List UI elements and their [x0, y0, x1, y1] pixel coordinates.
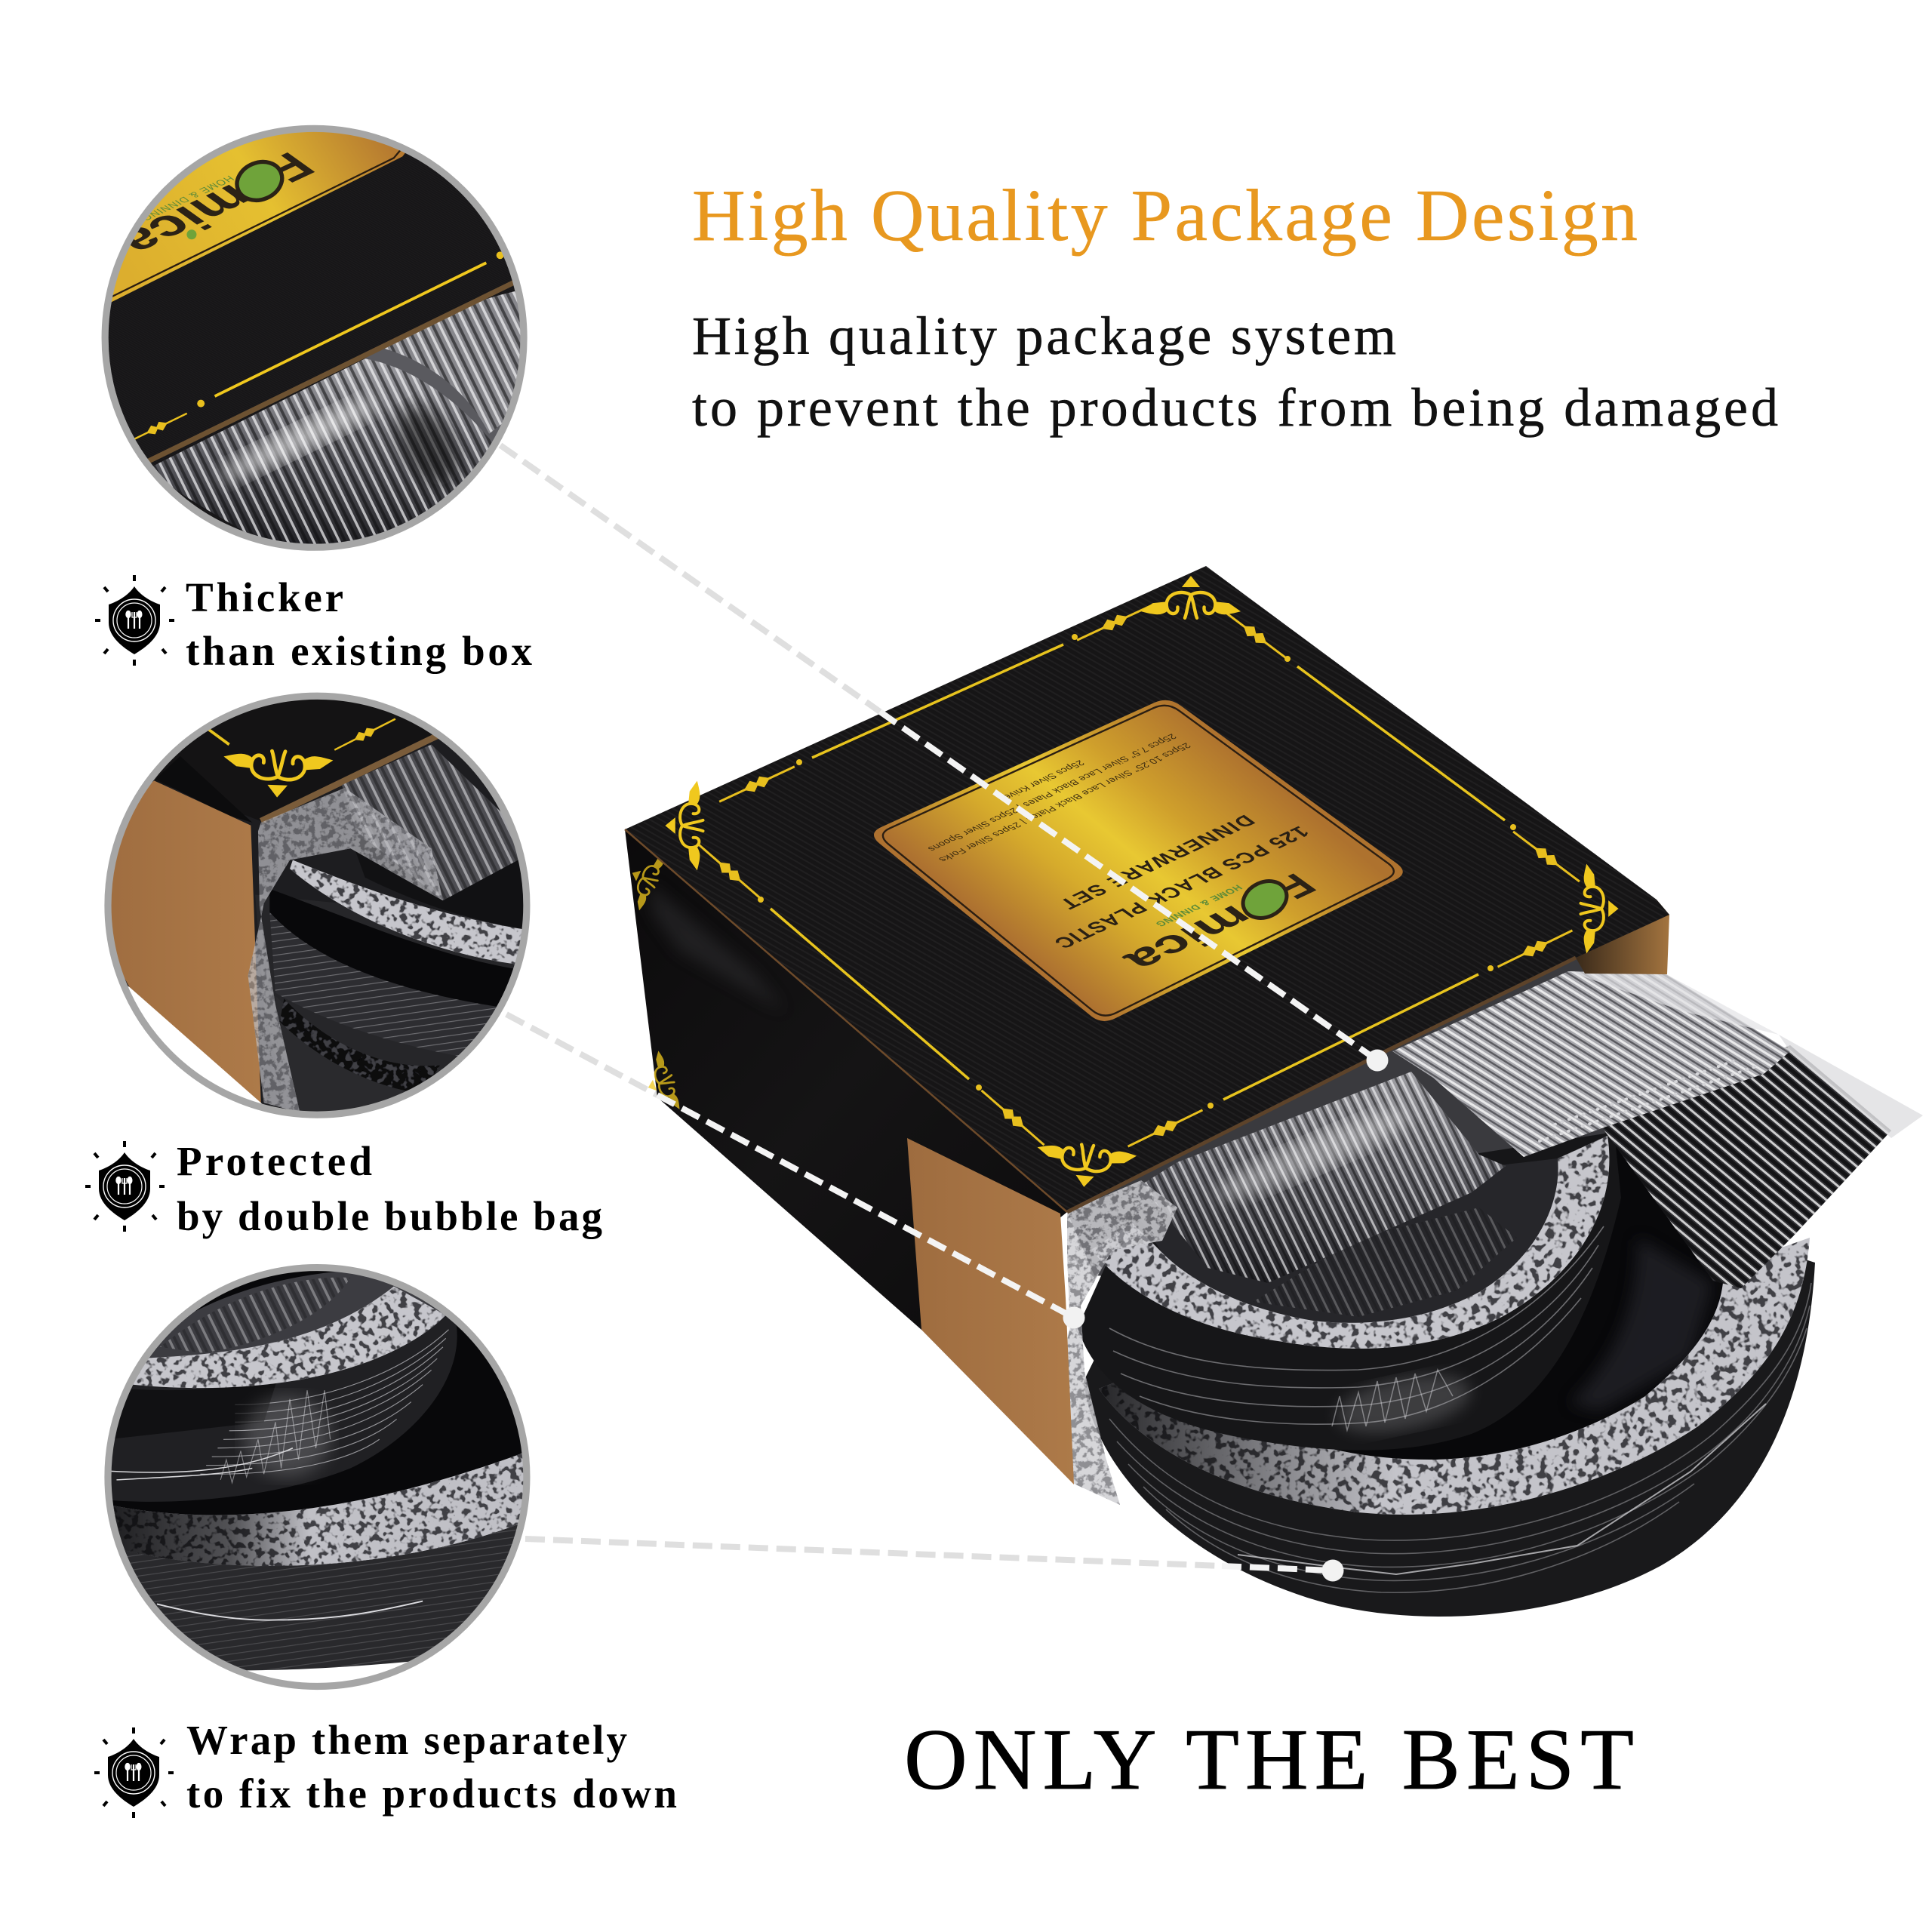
bag: forks — [1600, 1035, 1923, 1288]
label logo: HOME & DINNING — [1153, 883, 1245, 928]
subtitle — [692, 306, 1778, 438]
wrap scratches — [244, 1396, 331, 1477]
label: thicker than existing box: than existing box — [186, 628, 533, 674]
callout dot: bubble bag — [1063, 1307, 1085, 1328]
label: protected by double bubble bag: Protected — [177, 1138, 372, 1184]
wrap scratches — [1332, 1364, 1475, 1443]
small plate stack — [1078, 1132, 1621, 1451]
bag backing — [1067, 958, 1666, 1283]
side gloss — [649, 883, 785, 1011]
box side face — [625, 829, 1067, 1330]
gold corner ornaments — [666, 577, 1617, 1190]
detail circle: bubble bag — [104, 693, 530, 1118]
gold frame lines — [758, 634, 1516, 1109]
icon: shield 3 — [94, 1727, 174, 1818]
box top face — [625, 566, 1669, 1212]
callout line: bubble bag (white part) — [657, 1095, 1074, 1318]
callout line: bubble bag (grey part) — [506, 1014, 657, 1095]
label: thicker than existing box — [186, 574, 533, 674]
detail circle: thicker box: mica — [106, 177, 269, 264]
label: wrap them separately: Wrap them separately — [186, 1717, 627, 1763]
label logo: F — [1266, 867, 1327, 905]
large plate stack — [1084, 1132, 1815, 1617]
detail circle: thicker box — [101, 125, 528, 551]
slogan: ONLY THE BEST — [904, 1712, 1634, 1808]
label: wrap them separately: to fix the products down — [186, 1770, 677, 1817]
product photo: box with plates and cutlery — [620, 566, 1923, 1617]
title: High Quality Package Design — [692, 175, 1638, 257]
bubble wrap — [1060, 1180, 1177, 1505]
bag: dotted knife handles — [1540, 1060, 1758, 1141]
box inner back flap — [1576, 900, 1669, 974]
side ornaments — [620, 848, 683, 1115]
callout line: wrap (white part) — [1222, 1566, 1332, 1571]
icon: shield 2 — [85, 1141, 165, 1232]
label contents list: 25pcs 7.5" Silver Lace Black Plates | 25pcs Silver Spoons — [925, 732, 1180, 854]
label logo: mica — [1114, 899, 1266, 979]
label: wrap them separately — [186, 1717, 677, 1817]
label: thicker than existing box: Thicker — [186, 574, 343, 620]
callout dot: box — [1366, 1049, 1389, 1072]
label contents list: 25pcs 10.25" Silver Lace Black Plates | 25pcs Silver Forks — [936, 741, 1194, 864]
label: protected by double bubble bag — [177, 1138, 602, 1239]
gold flourishes — [694, 600, 1583, 1152]
label contents list: 25pcs Silver Knives — [995, 758, 1088, 804]
bag: knives — [1392, 971, 1790, 1157]
callout dot: wrap — [1322, 1559, 1343, 1582]
wrap seam — [1238, 1404, 1766, 1574]
label title: 125 PCS BLACK PLASTIC — [1049, 823, 1314, 952]
label logo — [1114, 867, 1327, 979]
callout line: box thickness (white part) — [880, 712, 1377, 1060]
label: protected by double bubble bag: by double bubble bag — [177, 1193, 602, 1239]
detail circle: wrap separately — [104, 1264, 530, 1690]
detail circle: thicker box: F — [254, 145, 327, 189]
detail circle: thicker box: HOME & DINNING — [138, 174, 236, 222]
gold label — [874, 700, 1403, 1021]
subtitle: to prevent the products from being damaged — [692, 377, 1778, 438]
icon: shield 1 — [95, 575, 174, 666]
label title: DINNERWARE SET — [1054, 812, 1260, 912]
callout line: box thickness (grey part) — [500, 445, 880, 712]
subtitle: High quality package system — [692, 306, 1396, 366]
callout line: wrap (grey part) — [525, 1539, 1222, 1566]
kraft cardboard flap — [907, 1138, 1074, 1484]
bag: cups — [1141, 1072, 1506, 1283]
